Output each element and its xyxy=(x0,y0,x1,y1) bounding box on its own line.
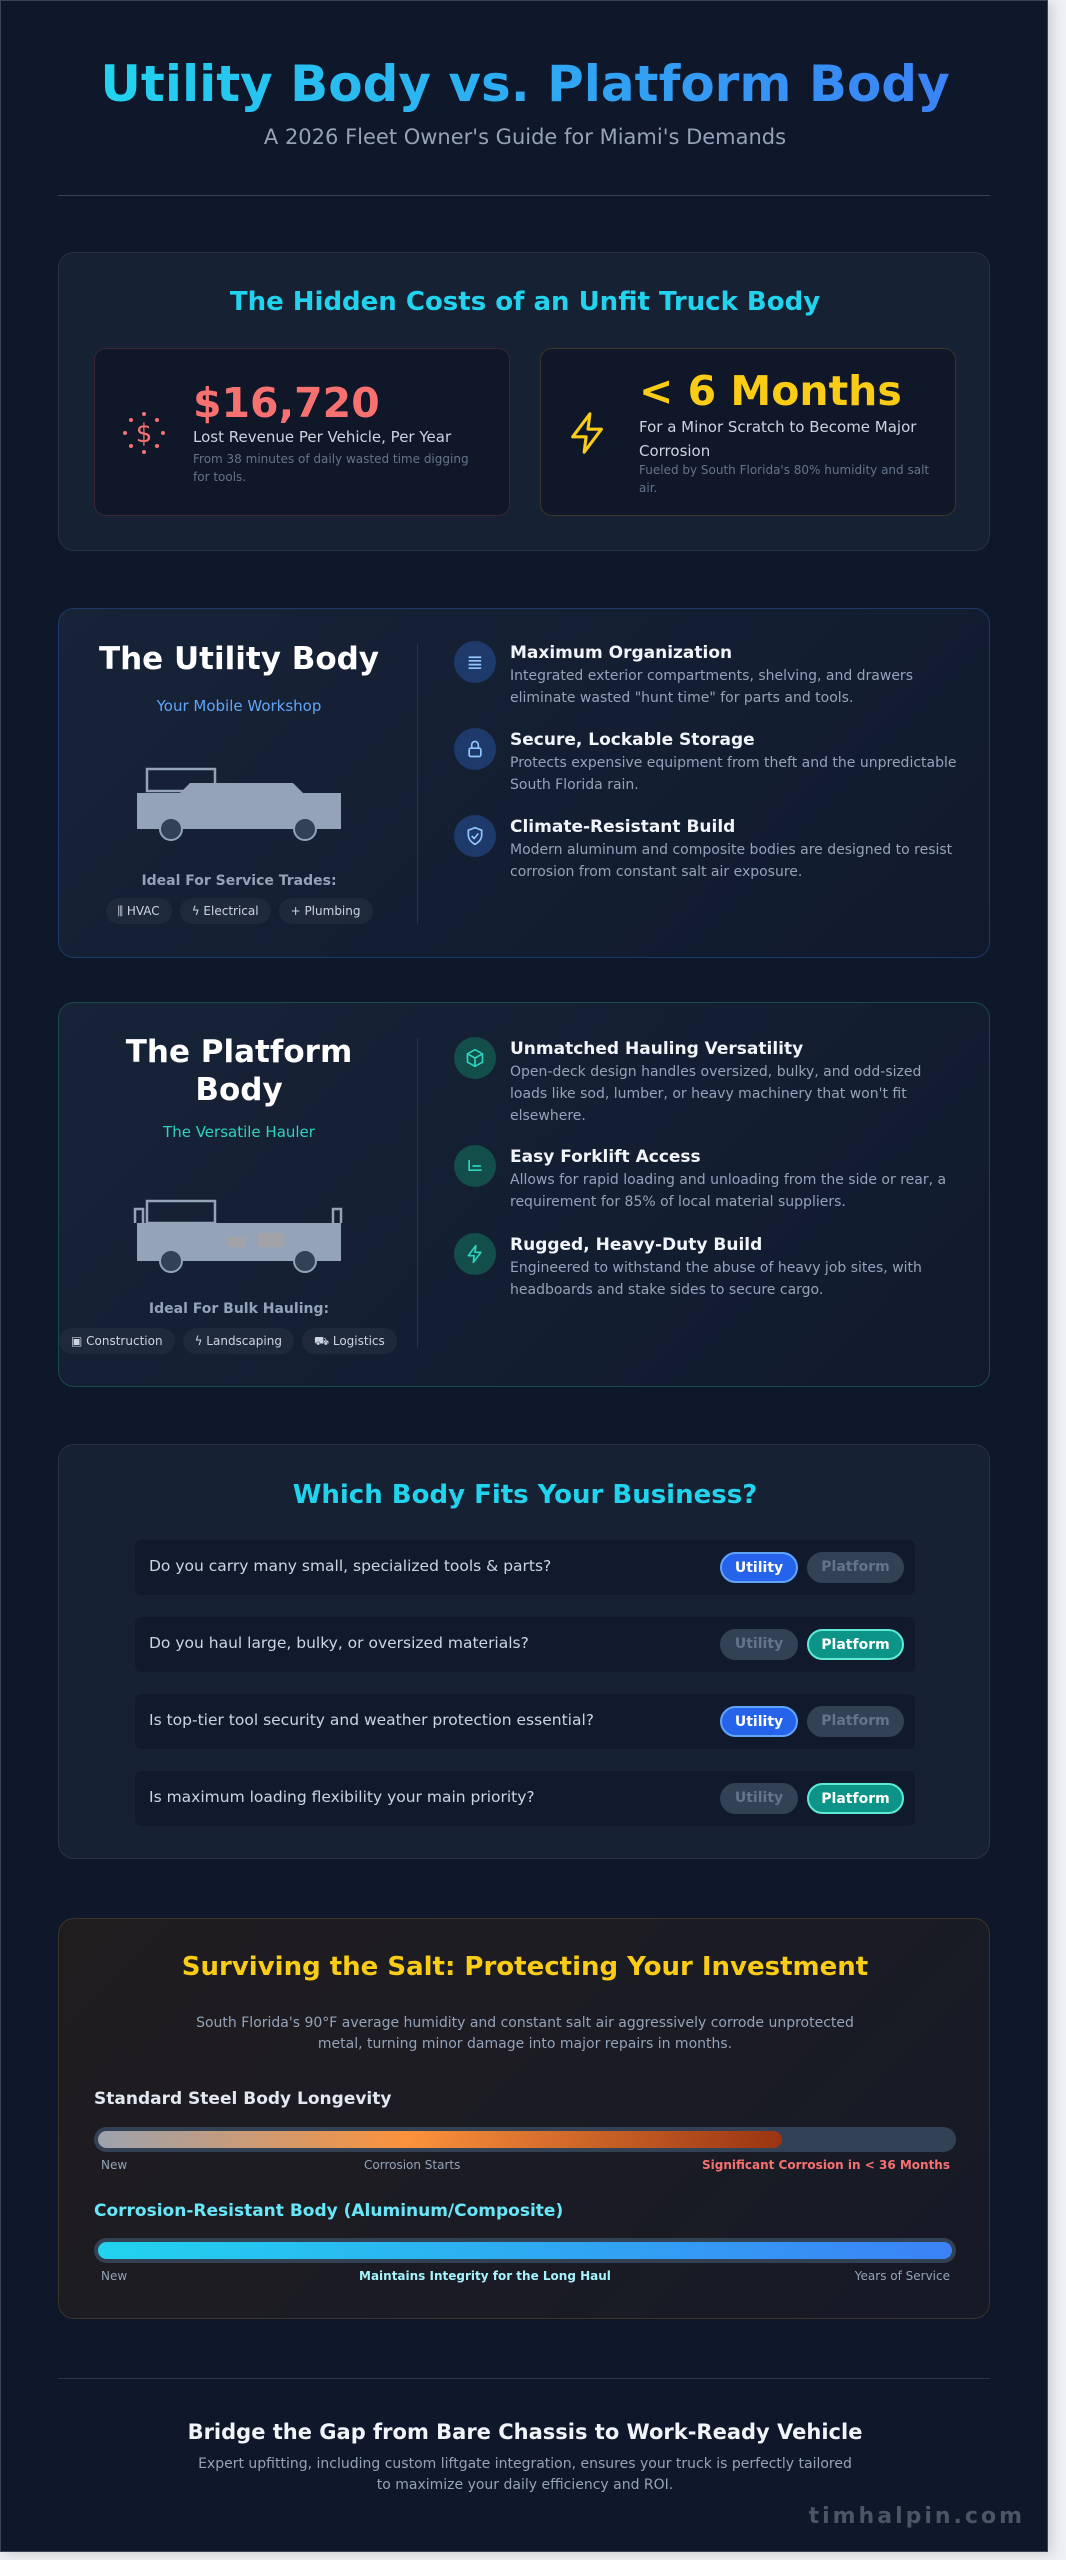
feature: climate resistant xyxy=(454,815,952,880)
chart: composite bar: Maintains Integrity for the Long Haul xyxy=(359,2269,611,2283)
row: flexibility: Platform xyxy=(821,1791,890,1807)
icon: dollar: $ xyxy=(136,419,152,449)
stat: < 6 months: < 6 Months xyxy=(639,367,902,415)
feature: forklift access xyxy=(454,1145,946,1210)
chart: steel bar xyxy=(94,2089,956,2172)
panel: salt xyxy=(58,1918,990,2319)
row: bulky xyxy=(135,1617,915,1672)
feature: organization xyxy=(454,641,913,706)
chart: steel bar: Standard Steel Body Longevity xyxy=(94,2089,391,2109)
text: salt description: South Florida's 90°F average humidity and constant salt air aggressively corrode unprotected metal, turning minor damage into major repairs in months. xyxy=(196,2015,854,2052)
heading: quiz: Which Body Fits Your Business? xyxy=(293,1480,757,1510)
row: bulky: Utility xyxy=(735,1636,783,1652)
tags: service trades: + Plumbing xyxy=(291,904,360,918)
panel: utility body xyxy=(58,608,990,958)
row: tools xyxy=(135,1540,915,1595)
heading: platform body: Body xyxy=(195,1072,283,1108)
panel: platform body: The Versatile Hauler xyxy=(163,1123,315,1141)
panel: utility body: Your Mobile Workshop xyxy=(157,697,321,715)
tags: service trades xyxy=(106,898,373,924)
title: Utility Body vs. Platform Body xyxy=(100,55,950,113)
card: lost revenue: From 38 minutes of daily wasted time digging for tools. xyxy=(193,452,469,484)
panel: salt: Corrosion Starts xyxy=(364,2158,460,2172)
tags: service trades: ⫼ HVAC xyxy=(118,904,160,918)
footer block: Bridge the Gap from Bare Chassis to Work-Ready Vehicle xyxy=(188,2420,862,2444)
panel: salt: Significant Corrosion in < 36 Months xyxy=(702,2158,950,2172)
heading: platform body: The Platform xyxy=(126,1034,352,1070)
footer block: Expert upfitting, including custom liftgate integration, ensures your truck is perfectly tailored to maximize your daily efficiency and ROI. xyxy=(198,2456,852,2493)
tags: bulk hauling: ▣ Construction xyxy=(71,1334,163,1348)
chart: composite bar: Years of Service xyxy=(855,2269,950,2283)
chart: composite bar: Corrosion-Resistant Body (Aluminum/Composite) xyxy=(94,2201,563,2221)
row: flexibility: Utility xyxy=(735,1790,783,1806)
feature: heavy-duty: Engineered to withstand the abuse of heavy job sites, with headboards and stake sides to secure cargo. xyxy=(510,1260,922,1298)
feature: hauling versatility: Open-deck design handles oversized, bulky, and odd-sized loads like sod, lumber, or heavy machinery that won't fit elsewhere. xyxy=(510,1064,921,1124)
panel: platform body: Ideal For Bulk Hauling: xyxy=(149,1301,329,1317)
heading: hidden costs: The Hidden Costs of an Unfit Truck Body xyxy=(230,287,820,317)
feature: hauling versatility xyxy=(454,1037,921,1124)
footer block xyxy=(188,2420,862,2493)
feature: secure storage xyxy=(454,728,956,793)
chart: composite bar: New xyxy=(101,2269,127,2283)
heading: salt: Surviving the Salt: Protecting Your Investment xyxy=(182,1952,868,1982)
row: flexibility: Is maximum loading flexibility your main priority? xyxy=(149,1788,535,1806)
feature: heavy-duty: Rugged, Heavy-Duty Build xyxy=(510,1235,762,1255)
icon: dollar xyxy=(123,412,165,454)
row: security: Utility xyxy=(735,1714,783,1730)
feature: organization: Maximum Organization xyxy=(510,643,732,663)
feature: organization: Integrated exterior compartments, shelving, and drawers eliminate wasted "hunt time" for parts and tools. xyxy=(510,668,913,706)
subtitle: A 2026 Fleet Owner's Guide for Miami's Demands xyxy=(264,125,786,149)
feature: secure storage: Protects expensive equipment from theft and the unpredictable South Florida rain. xyxy=(510,755,956,793)
tags: bulk hauling: ⛟ Logistics xyxy=(314,1334,385,1348)
panel: utility body: Ideal For Service Trades: xyxy=(141,873,337,889)
stat: $16,720: $16,720 xyxy=(193,379,380,427)
row: security xyxy=(135,1694,915,1749)
row: flexibility xyxy=(135,1771,915,1826)
feature: hauling versatility: Unmatched Hauling Versatility xyxy=(510,1039,803,1059)
heading: platform body xyxy=(126,1034,352,1108)
heading: utility body: The Utility Body xyxy=(99,641,379,677)
feature: forklift access: Allows for rapid loading and unloading from the side or rear, a requirement for 85% of local material suppliers. xyxy=(510,1172,946,1210)
panel: hidden costs xyxy=(58,252,990,551)
card: corrosion xyxy=(540,348,956,516)
feature: secure storage: Secure, Lockable Storage xyxy=(510,730,755,750)
tags: service trades: ϟ Electrical xyxy=(192,904,259,918)
row: tools: Platform xyxy=(821,1559,890,1575)
panel: salt: New xyxy=(101,2158,127,2172)
icon: platform truck xyxy=(134,1200,342,1273)
row: security: Platform xyxy=(821,1713,890,1729)
card: corrosion: Fueled by South Florida's 80% humidity and salt air. xyxy=(639,463,929,495)
chart: composite bar xyxy=(94,2201,956,2283)
feature: heavy-duty xyxy=(454,1233,922,1298)
row: tools: Utility xyxy=(735,1560,783,1576)
feature: climate resistant: Climate-Resistant Build xyxy=(510,817,735,837)
row: tools: Do you carry many small, specialized tools & parts? xyxy=(149,1557,551,1575)
row: security: Is top-tier tool security and weather protection essential? xyxy=(149,1711,594,1729)
panel: platform body xyxy=(58,1002,990,1387)
tags: bulk hauling xyxy=(60,1328,397,1354)
row: bulky: Do you haul large, bulky, or oversized materials? xyxy=(149,1634,529,1652)
card: corrosion: For a Minor Scratch to Become Major Corrosion xyxy=(639,418,916,460)
feature: climate resistant: Modern aluminum and composite bodies are designed to resist corrosion from constant salt air exposure. xyxy=(510,842,952,880)
card: lost revenue xyxy=(94,348,510,516)
row: bulky: Platform xyxy=(821,1637,890,1653)
feature: forklift access: Easy Forklift Access xyxy=(510,1147,701,1167)
feature: organization: ≣ xyxy=(467,650,483,674)
card: lost revenue: Lost Revenue Per Vehicle, Per Year xyxy=(193,428,451,446)
watermark: timhalpin.com xyxy=(809,2504,1025,2529)
tags: bulk hauling: ϟ Landscaping xyxy=(195,1334,282,1348)
panel: quiz xyxy=(58,1444,990,1859)
icon: lightning xyxy=(571,412,603,454)
icon: utility truck xyxy=(137,768,341,841)
